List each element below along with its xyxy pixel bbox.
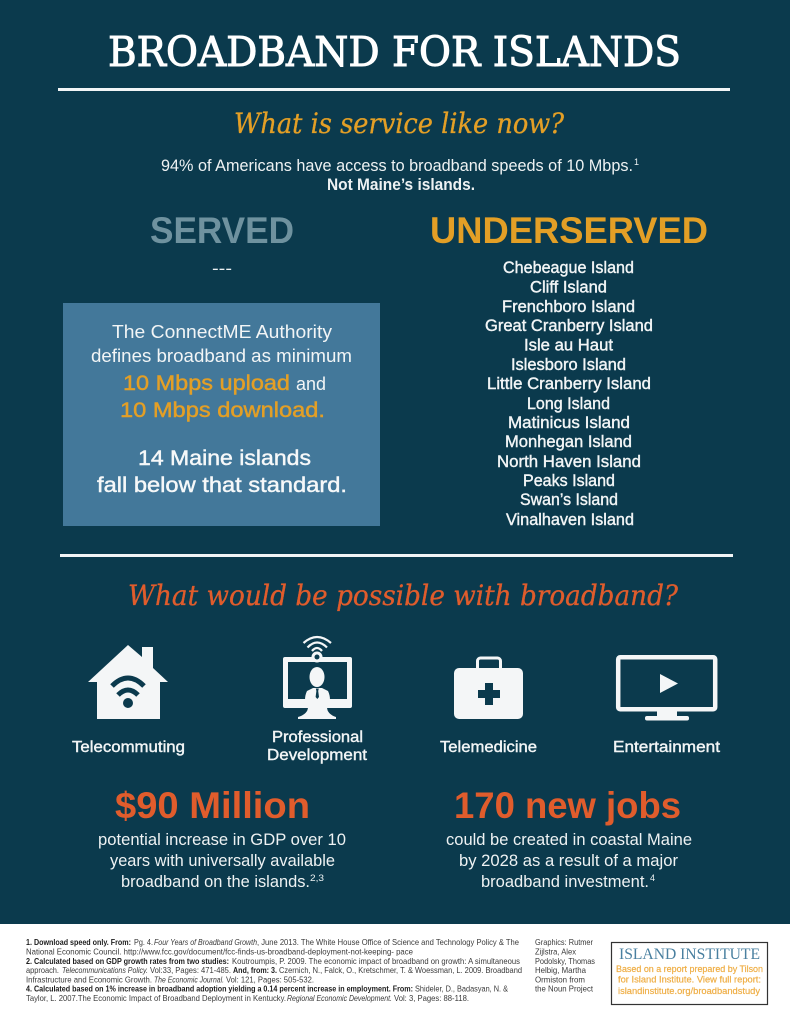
intro text: [161, 156, 639, 194]
text: jobs created: 4: [650, 873, 655, 883]
footnotes: 4. Calculated based on 1% increase in broadband adoption yielding a 0.14 percent increase in employment. From:: [26, 984, 413, 994]
panel: island institute logo and report note: [612, 942, 768, 1004]
list: underserved islands: Isle au Haut: [524, 336, 613, 354]
list: underserved islands: Monhegan Island: [505, 433, 632, 451]
panel: broadband definition: 10 Mbps download.: [120, 399, 325, 422]
graphics credits: Graphics: Rutmer: [535, 937, 593, 947]
list: underserved islands: Cliff Island: [530, 278, 607, 296]
intro text: 94% of Americans have access to broadband speeds of 10 Mbps.: [161, 156, 633, 175]
intro text: Not Maine’s islands.: [327, 175, 475, 194]
footnotes: National Economic Council. http://www.fcc.gov/document/fcc-finds-us-broadband-deployment-not-keeping- pace: [26, 946, 413, 956]
footnotes: Vol: 3, Pages: 88-118.: [394, 993, 469, 1003]
label: professional development: [267, 729, 368, 764]
footnotes: Czernich, N., Falck, O., Kretschmer, T. & Woessman, L. 2009. Broadband: [279, 965, 522, 975]
list: underserved islands: [485, 259, 653, 529]
label: professional development: Development: [267, 747, 368, 764]
heading: underserved: UNDERSERVED: [430, 210, 708, 251]
panel: broadband definition: 14 Maine islands: [138, 447, 311, 470]
graphics credits: Podolsky, Thomas: [535, 956, 595, 966]
text: GDP increase: [98, 830, 346, 891]
heading: served: SERVED: [150, 210, 294, 251]
footnotes: 2. Calculated based on GDP growth rates from two studies:: [26, 956, 229, 966]
footnotes: Koutroumpis, P. 2009. The economic impact of broadband on growth: A simultaneous: [232, 956, 520, 966]
panel: island institute logo and report note: for Island Institute. View full report:: [618, 974, 761, 984]
footnotes: Taylor, L. 2007.The Economic Impact of Broadband Deployment in Kentucky.: [26, 993, 286, 1003]
stat: 90 million: $90 Million: [115, 785, 310, 826]
text: GDP increase: 2,3: [310, 873, 324, 883]
text: GDP increase: potential increase in GDP over 10: [98, 830, 346, 849]
panel: broadband definition: [63, 303, 380, 526]
list: underserved islands: Great Cranberry Island: [485, 317, 653, 335]
panel: broadband definition: The ConnectME Authority: [112, 322, 332, 342]
list: underserved islands: Islesboro Island: [511, 356, 626, 374]
list: underserved islands: Frenchboro Island: [502, 298, 635, 316]
footnotes: Four Years of Broadband Growth: [154, 937, 257, 947]
label: telemedicine: Telemedicine: [440, 739, 537, 756]
list: underserved islands: Peaks Island: [523, 472, 615, 490]
list: underserved islands: Matinicus Island: [508, 414, 630, 432]
icon: house with wifi: [88, 645, 168, 719]
text: jobs created: broadband investment.: [481, 872, 649, 891]
footnotes: 1. Download speed only. From:: [26, 937, 131, 947]
heading: served: [150, 210, 294, 278]
text: GDP increase: years with universally available: [110, 851, 335, 870]
footnotes: Shideler, D., Badasyan, N. &: [415, 984, 508, 994]
icon: medical kit: [454, 658, 523, 719]
footnotes: Vol: 121, Pages: 505-532.: [226, 974, 314, 984]
text: GDP increase: broadband on the islands.: [121, 872, 310, 891]
panel: island institute logo and report note: islandinstitute.org/broadbandstudy: [618, 986, 761, 996]
footnotes: Vol:33, Pages: 471-485.: [150, 965, 231, 975]
heading: what would be possible: What would be possible with broadband?: [128, 579, 679, 612]
graphics credits: [535, 937, 595, 994]
text: jobs created: [446, 830, 692, 891]
list: underserved islands: Chebeague Island: [503, 259, 634, 277]
graphics credits: Ormiston from: [535, 974, 585, 984]
label: entertainment: Entertainment: [613, 739, 721, 756]
panel: broadband definition: 10 Mbps upload: [123, 372, 290, 395]
footer panel: [0, 924, 790, 1024]
label: professional development: Professional: [272, 729, 363, 746]
icon: video monitor with presenter: [283, 637, 352, 719]
stat: 170 new jobs: 170 new jobs: [454, 785, 681, 826]
title: BROADBAND FOR ISLANDS: [108, 28, 681, 76]
label: telecommuting: Telecommuting: [72, 739, 185, 756]
list: underserved islands: Vinalhaven Island: [506, 511, 634, 529]
list: underserved islands: Little Cranberry Island: [487, 375, 651, 393]
panel: island institute logo and report note: Based on a report prepared by Tilson: [616, 964, 763, 974]
footnotes: The Economic Journal.: [154, 974, 224, 984]
text: jobs created: could be created in coastal Maine: [446, 830, 692, 849]
panel: broadband definition: and: [296, 374, 326, 394]
intro text: 1: [634, 157, 639, 167]
footnotes: approach.: [26, 965, 59, 975]
heading: served: ---: [212, 259, 232, 278]
graphics credits: the Noun Project: [535, 984, 594, 994]
footnotes: , June 2013. The White House Office of Science and Technology Policy & The: [257, 937, 519, 947]
footnotes: Infrastructure and Economic Growth.: [26, 974, 152, 984]
footnotes: And, from: 3.: [233, 965, 277, 975]
footnotes: Telecommunications Policy.: [62, 965, 148, 975]
footnotes: [26, 937, 522, 1003]
footnotes: Regional Economic Development.: [287, 993, 392, 1003]
list: underserved islands: Long Island: [527, 395, 610, 413]
graphics credits: Helbig, Martha: [535, 965, 586, 975]
heading: what is service like now: What is service like now?: [234, 107, 565, 140]
list: underserved islands: Swan’s Island: [520, 491, 618, 509]
graphics credits: Zijlstra, Alex: [535, 946, 577, 956]
list: underserved islands: North Haven Island: [497, 453, 641, 471]
text: jobs created: by 2028 as a result of a major: [459, 851, 678, 870]
icon: screen with play button: [618, 657, 715, 720]
panel: broadband definition: defines broadband as minimum: [91, 346, 352, 366]
panel: island institute logo and report note: ISLAND INSTITUTE: [619, 946, 760, 963]
panel: broadband definition: fall below that standard.: [97, 474, 347, 497]
footnotes: Pg. 4.: [134, 937, 153, 947]
